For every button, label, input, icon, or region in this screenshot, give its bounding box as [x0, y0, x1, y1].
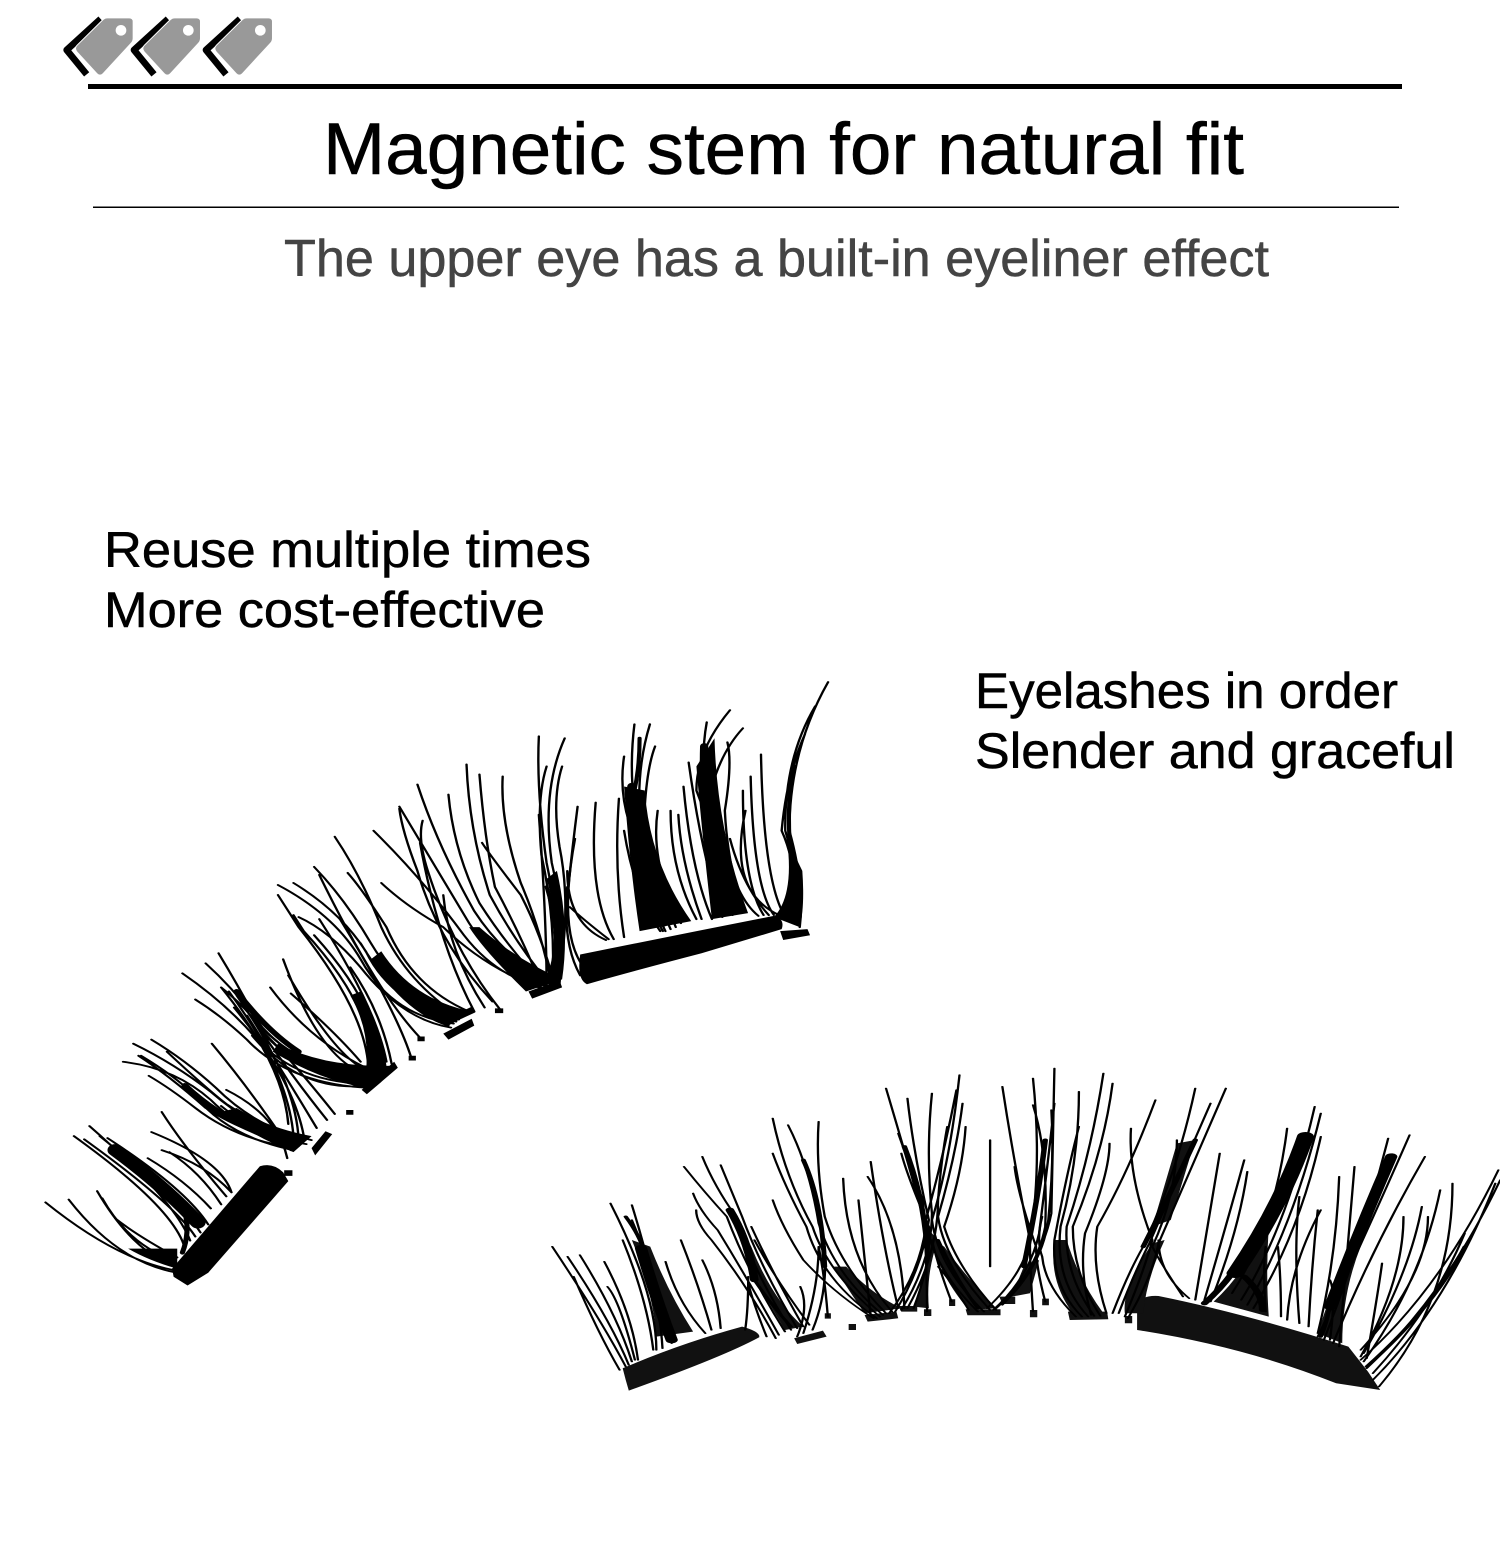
cluster 6 — [1039, 1073, 1226, 1318]
callout: eyelashes — [975, 663, 1455, 779]
lashes near band — [45, 1112, 231, 1273]
lower rule — [93, 206, 1399, 208]
cluster D — [278, 837, 469, 1068]
cluster B — [123, 1040, 312, 1158]
top rule — [88, 84, 1402, 89]
cluster H — [683, 710, 743, 919]
cluster I — [722, 682, 828, 927]
left band lashes — [552, 1203, 721, 1370]
dense root fans — [128, 738, 803, 1269]
callout: eyelashes: Slender and graceful — [975, 723, 1455, 779]
cluster 3 — [773, 1118, 904, 1337]
cluster C — [182, 953, 376, 1140]
callout: eyelashes: Eyelashes in order — [975, 663, 1398, 719]
cluster 4 — [886, 1088, 947, 1313]
eyelash strip: upper left — [45, 682, 828, 1286]
callout: reuse: More cost-effective — [104, 582, 545, 638]
cluster G — [622, 724, 702, 931]
subtitle: The upper eye has a built-in eyeliner effect — [284, 230, 1270, 288]
cluster E — [374, 764, 554, 1012]
cluster 2 — [684, 1157, 809, 1338]
callout: reuse — [104, 522, 591, 638]
icon: three price tags — [67, 18, 272, 75]
cluster 5 — [926, 1075, 996, 1312]
cluster F — [538, 736, 578, 987]
right thick clusters — [1235, 1137, 1306, 1273]
title: Magnetic stem for natural fit — [323, 109, 1244, 190]
callout: reuse: Reuse multiple times — [104, 522, 591, 578]
eyelash strip: lower right — [552, 1068, 1500, 1391]
dense root fans — [632, 1140, 1391, 1343]
